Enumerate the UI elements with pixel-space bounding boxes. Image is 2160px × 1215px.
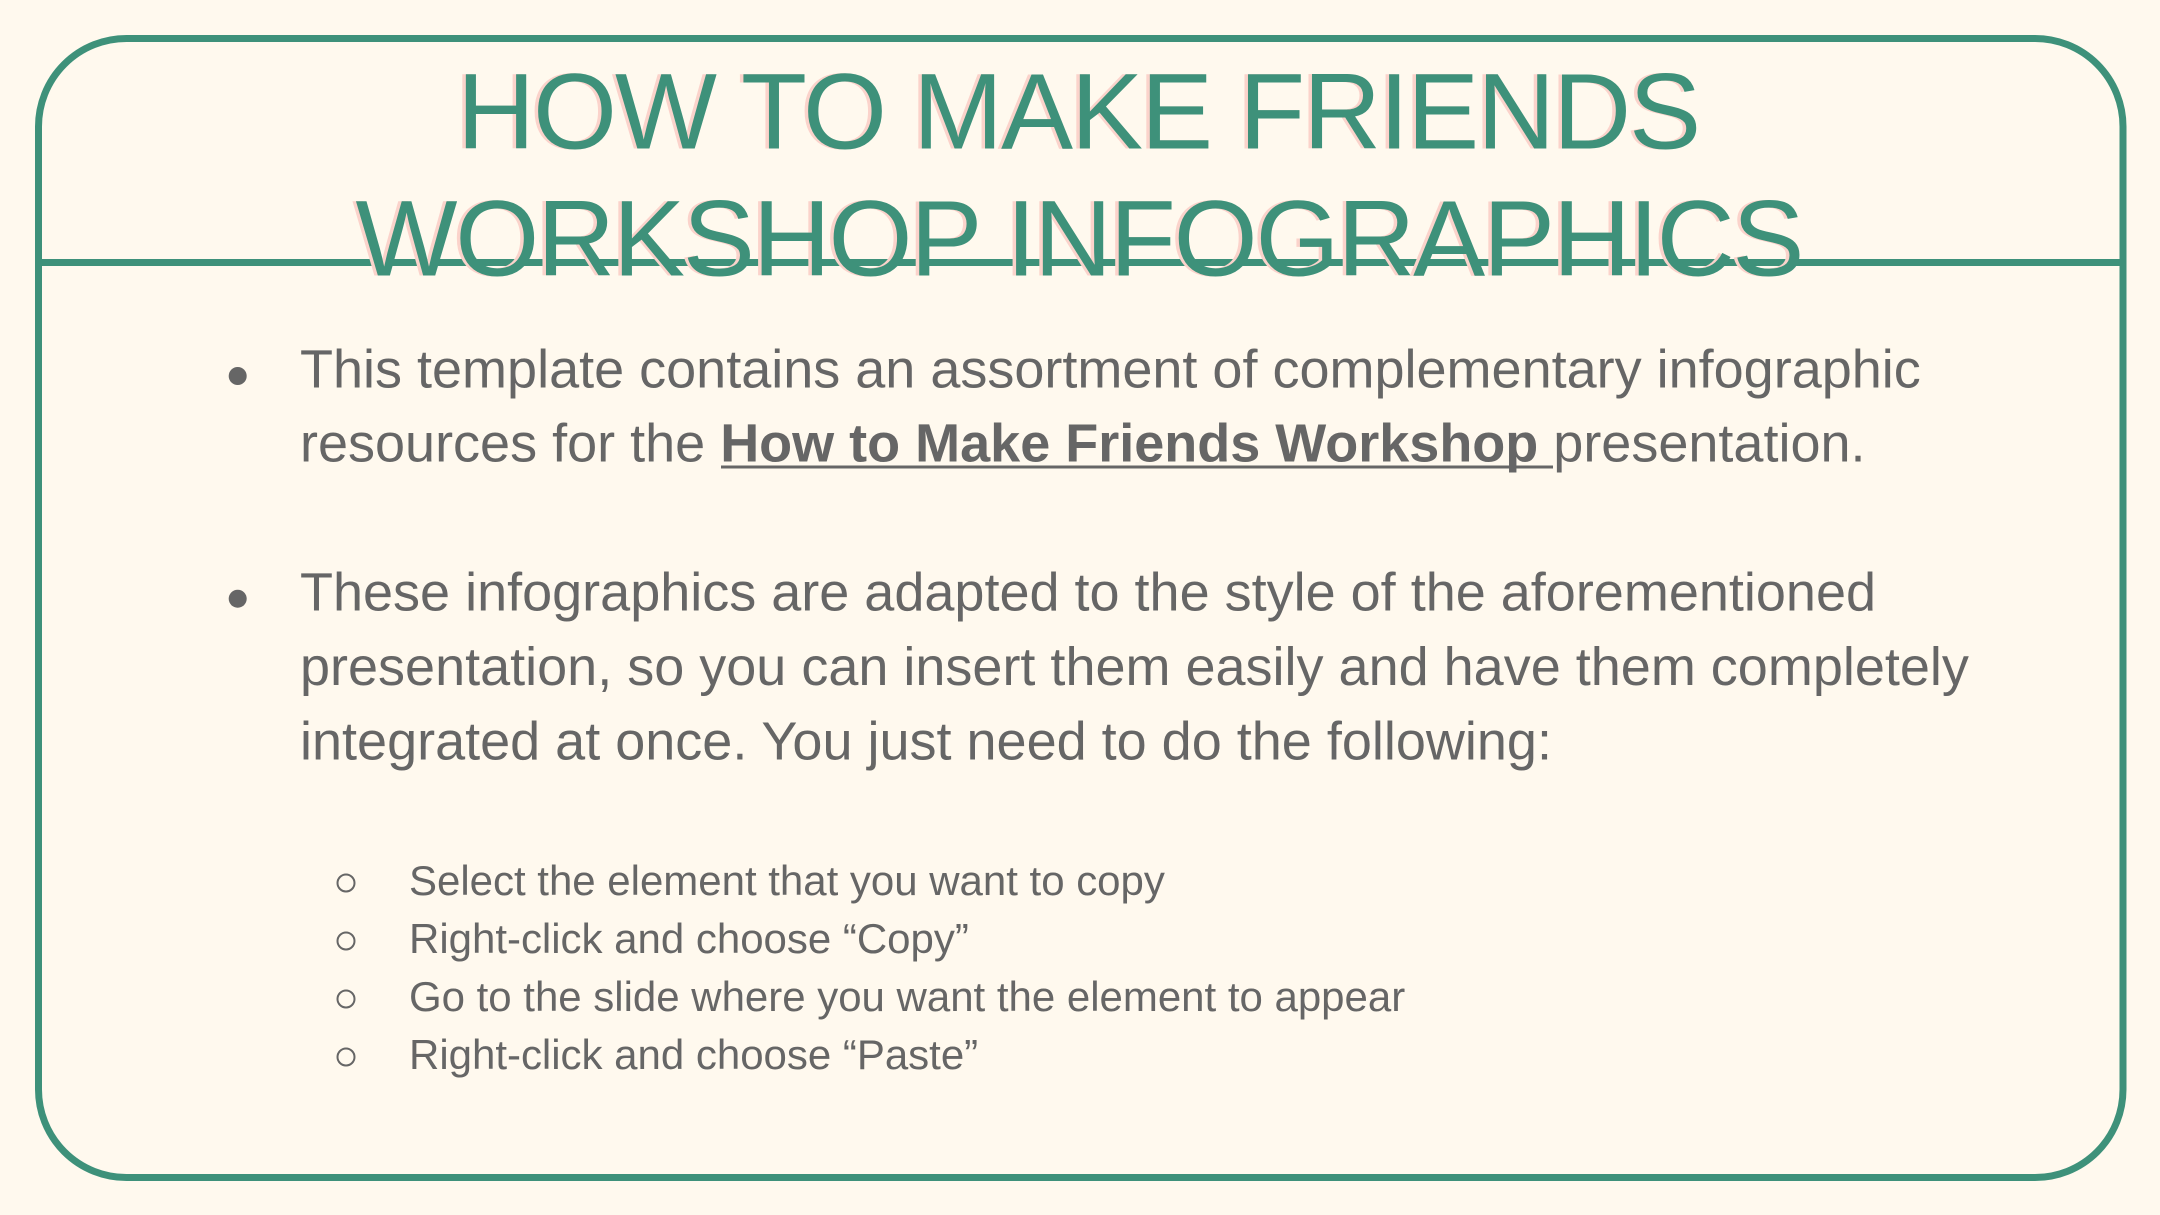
title: HOW TO MAKE FRIENDS [457,50,1699,171]
title: WORKSHOP INFOGRAPHICS [352,177,1799,298]
text block: second bullet: These infographics are adapted to the style of the aforementioned [300,563,1876,623]
title: HOW TO MAKE FRIENDS [454,50,1696,171]
list: steps: Right-click and choose “Copy” [409,915,969,962]
text block: second bullet: integrated at once. You just need to do the following: [300,712,1552,772]
header divider line [38,259,2123,266]
text block: second bullet: presentation, so you can insert them easily and have them completely [300,637,1969,697]
list: steps [338,857,1405,1078]
list: steps: Go to the slide where you want the element to appear [409,973,1405,1020]
text block: second bullet [229,563,1969,772]
text block: first bullet: This template contains an assortment of complementary infographic [300,339,1921,399]
text block: first bullet [229,339,1921,474]
list: steps: Select the element that you want to copy [409,857,1165,904]
text block: first bullet: resources for the How to Make Friends Workshop presentation. [300,414,1866,474]
title [352,50,1802,298]
title: WORKSHOP INFOGRAPHICS [356,177,1802,298]
list: steps: Right-click and choose “Paste” [409,1031,978,1078]
